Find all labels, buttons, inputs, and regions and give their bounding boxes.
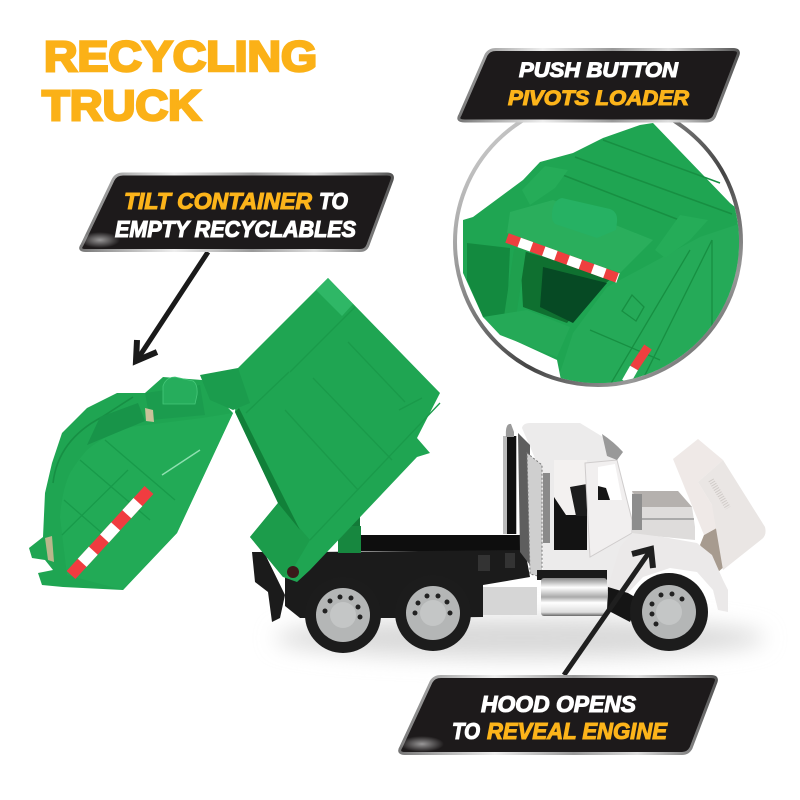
roof ridges [564,140,732,220]
reflective stripe [71,490,149,575]
banner: tilt container: TILT CONTAINER [124,188,312,214]
open hood [673,439,766,572]
ground shadow [275,618,765,658]
banner: hood opens: HOOD OPENS [481,691,637,717]
green container [235,278,440,582]
fuel tank [541,578,607,616]
banner: push button: PUSH BUTTON [519,59,679,82]
chassis [252,535,530,622]
wheels [305,573,708,653]
title [42,33,317,130]
button [163,377,197,404]
side panel [560,222,745,390]
fender [608,533,728,612]
callout circle: push button detail [455,99,745,390]
chrome grille strip [527,453,542,577]
cab opening [554,460,587,550]
arrow: hood opens [564,549,653,675]
loader opening [467,243,510,317]
banner: hood opens [400,676,716,754]
arrow: tilt container [136,252,208,361]
red and white stripe [507,238,618,278]
banner: tilt container: EMPTY RECYCLABLES [115,216,357,242]
door [585,460,632,557]
banner: tilt container: TO [319,188,348,214]
banner: hood opens: REVEAL ENGINE [487,718,668,744]
loader mass [463,123,745,390]
side stripe [626,347,648,382]
hinges [554,171,564,176]
banner: push button [459,50,738,121]
green loader [29,368,250,590]
diamond plate step [483,587,537,615]
title: TRUCK [42,82,201,130]
button [556,198,617,226]
banner: push button: PIVOTS LOADER [508,87,690,110]
cab [518,423,634,592]
truck with raised container [29,278,766,653]
banner: tilt container [80,174,392,250]
banner: hood opens: TO [452,718,480,744]
title: RECYCLING [44,33,317,81]
hinge [200,368,250,410]
engine [632,491,695,540]
ledge [507,200,653,273]
hydraulic piston [338,505,361,553]
exhaust stack [503,424,517,534]
